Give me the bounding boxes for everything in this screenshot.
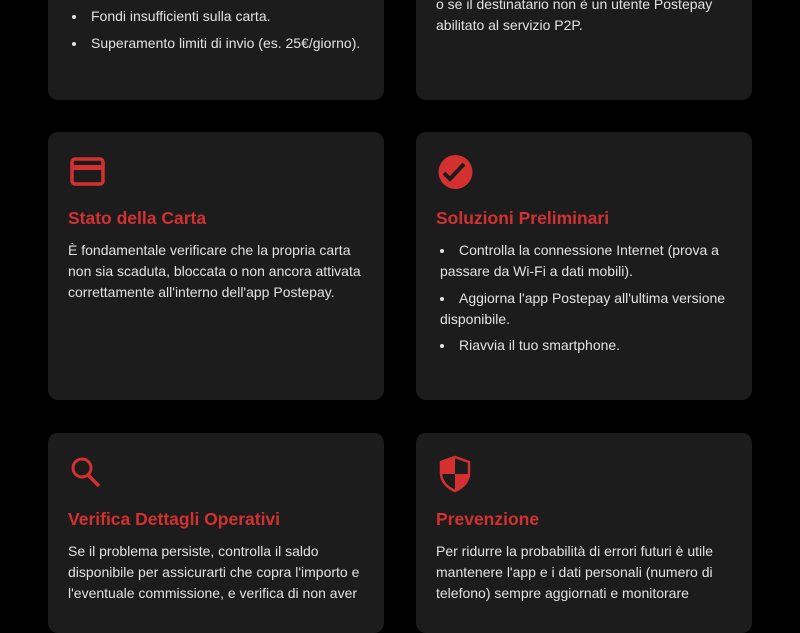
card: top right (cut)	[416, 0, 752, 100]
icon: shield	[440, 456, 470, 492]
bullet list: cause: Fondi insufficienti sulla carta.	[91, 8, 270, 24]
heading: Stato della Carta	[68, 208, 206, 228]
bullet list: Aggiorna l'app Postepay all'ultima versione disponibile.	[440, 290, 725, 326]
card: Stato della Carta	[48, 132, 384, 400]
heading: Soluzioni Preliminari	[436, 208, 609, 228]
card: top left (cut)	[48, 0, 384, 100]
bullet list: Controlla la connessione Internet (prova a passare da Wi-Fi a dati mobili).	[440, 242, 719, 279]
bullet list: Riavvia il tuo smartphone.	[459, 337, 620, 353]
text: Per ridurre la probabilità di errori futuri è utile mantenere l'app e i dati personali (numero di telefono) sempre aggiornati e monitorare	[436, 543, 713, 601]
bullet list	[440, 242, 725, 353]
heading: Prevenzione	[436, 509, 539, 529]
card: Soluzioni Preliminari	[416, 132, 752, 400]
icon: credit card	[70, 157, 105, 186]
icon: search	[72, 458, 100, 488]
bullet list: cause	[72, 8, 360, 51]
heading: Verifica Dettagli Operativi	[68, 509, 280, 529]
text: È fondamentale verificare che la propria carta non sia scaduta, bloccata o non ancora attivata correttamente all'interno dell'app Postepay.	[68, 242, 361, 300]
icon: check circle	[438, 155, 472, 189]
bullet list: cause: Superamento limiti di invio (es. 25€/giorno).	[91, 34, 360, 50]
card: Prevenzione	[416, 433, 752, 633]
card: Verifica Dettagli Operativi	[48, 433, 384, 633]
text: Se il problema persiste, controlla il saldo disponibile per assicurarti che copra l'importo e l'eventuale commissione, e verifica di non aver	[68, 543, 359, 601]
